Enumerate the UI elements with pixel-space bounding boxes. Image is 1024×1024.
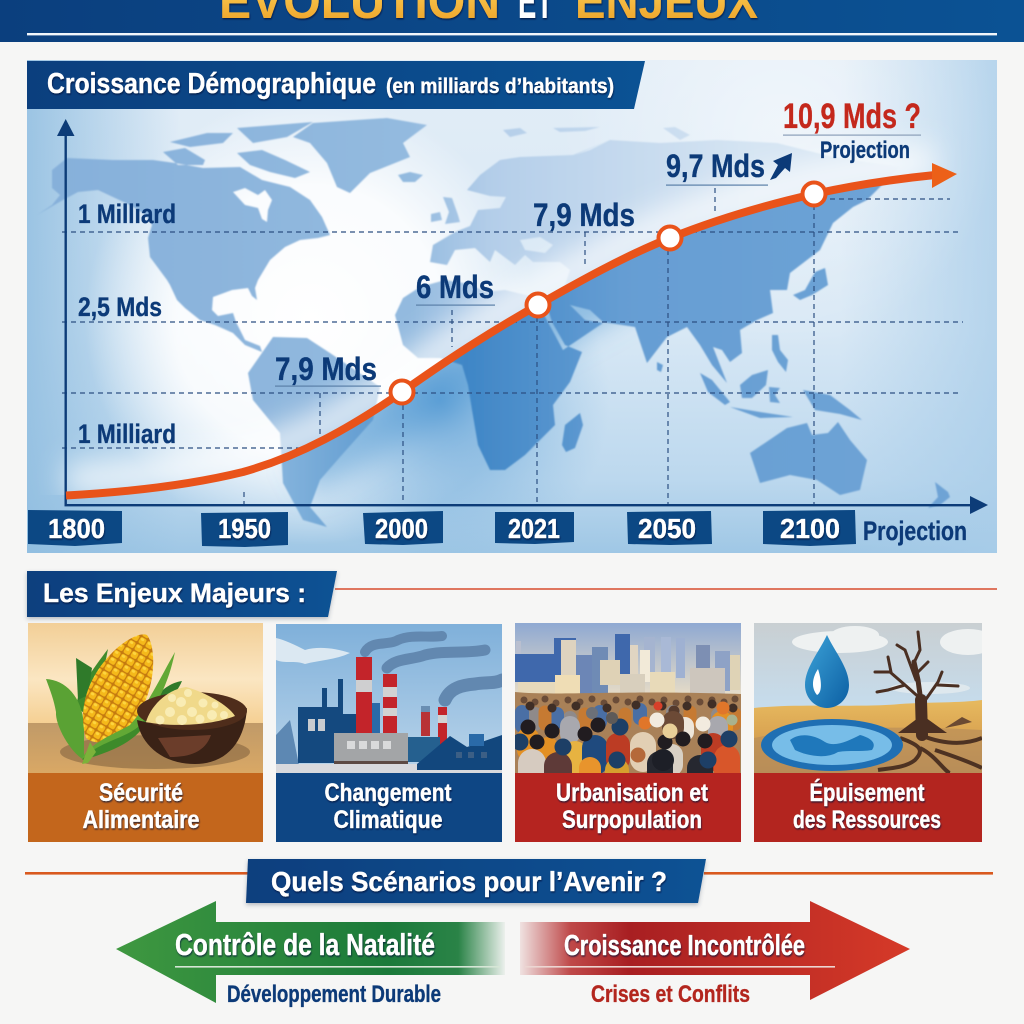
- grid lines: [62, 188, 963, 505]
- year labels: 2050: [638, 513, 696, 544]
- projection label: 10,9 Mds ?: [783, 97, 921, 136]
- year labels: 2021: [508, 513, 560, 544]
- arrow: uncontrolled growth scenario: [520, 901, 910, 1000]
- illustration: corn and bowl: [28, 623, 263, 773]
- value labels: 6 Mds: [416, 269, 494, 305]
- projection label: [783, 97, 921, 164]
- back row: [535, 712, 718, 726]
- population curve: [66, 163, 957, 496]
- illustration: factory: [276, 624, 502, 773]
- section heading: scenarios: Quels Scénarios pour l’Avenir ?: [271, 866, 667, 897]
- year labels: 2100: [780, 513, 840, 544]
- illustration: water drop, pool and dead tree: [754, 623, 996, 773]
- y axis labels: 2,5 Mds: [78, 292, 162, 322]
- card: food security: Sécurité: [99, 779, 183, 807]
- data points: [390, 182, 826, 404]
- world map background: [27, 60, 997, 553]
- card label: [515, 773, 741, 842]
- pool: [761, 719, 903, 771]
- corn cob: [83, 634, 153, 742]
- year labels: 1800: [48, 513, 105, 544]
- chart heading: (en milliards d’habitants): [386, 75, 614, 98]
- value labels: 9,7 Mds: [666, 148, 765, 184]
- section heading: Les Enjeux Majeurs: Les Enjeux Majeurs :: [43, 578, 306, 608]
- value labels: [275, 148, 792, 387]
- title text: [219, 0, 758, 29]
- card label: [276, 773, 502, 842]
- bowl: [137, 708, 247, 764]
- corn leaves: [76, 649, 108, 715]
- card: resource depletion: [754, 623, 996, 842]
- bowl of grains: [146, 687, 235, 725]
- card: climate change: Changement: [324, 779, 452, 807]
- card label: [754, 773, 982, 842]
- skyline: [515, 634, 740, 694]
- chart heading: Croissance Démographique: [47, 68, 376, 100]
- projection label: Projection: [820, 137, 910, 164]
- cracks: [878, 735, 982, 773]
- y axis labels: [78, 199, 176, 449]
- card: urbanisation: Surpopulation: [562, 806, 702, 834]
- chart heading: [27, 61, 645, 109]
- mid row bodies: [528, 722, 722, 762]
- card: food security: Alimentaire: [82, 806, 200, 834]
- arrow: birth control scenario: Contrôle de la Natalité: [175, 927, 435, 962]
- year labels: [28, 510, 856, 547]
- axes: [57, 119, 988, 514]
- year labels: 2000: [375, 513, 428, 544]
- icon: small up arrow: [770, 153, 792, 180]
- grey unit: [334, 733, 408, 762]
- illustration: city and crowd: [515, 623, 741, 776]
- crowd: [515, 692, 741, 776]
- card: food security: [28, 623, 263, 842]
- factory buildings: [298, 679, 356, 763]
- title banner: [0, 0, 1024, 42]
- card: resource depletion: Épuisement: [810, 778, 925, 807]
- dark roof: [417, 735, 502, 770]
- front bodies: [518, 763, 546, 775]
- smoke: [365, 636, 502, 700]
- card: urbanisation: Urbanisation et: [556, 779, 709, 807]
- card: resource depletion: des Ressources: [793, 806, 941, 834]
- card label: [28, 773, 263, 842]
- arrow: birth control scenario: [116, 901, 505, 1003]
- y axis labels: 1 Milliard: [78, 199, 176, 229]
- panel: population growth chart: [27, 60, 997, 553]
- dead tree: [875, 632, 958, 735]
- section heading: Les Enjeux Majeurs: [27, 571, 997, 617]
- x axis projection note: Projection: [863, 516, 967, 546]
- arrow: uncontrolled growth scenario: Croissance Incontrôlée: [564, 930, 805, 962]
- chimneys: [356, 657, 372, 735]
- section heading: scenarios: [25, 859, 993, 903]
- y axis labels: 1 Milliard: [78, 419, 176, 449]
- year labels: 1950: [218, 513, 271, 544]
- heads: [528, 725, 705, 742]
- crises text: Crises et Conflits: [591, 981, 750, 1008]
- card: climate change: Climatique: [334, 806, 443, 834]
- card: climate change: [276, 624, 502, 842]
- card: urbanisation: [515, 623, 741, 842]
- value labels: 7,9 Mds: [533, 197, 635, 233]
- value labels: 7,9 Mds: [275, 351, 377, 387]
- sustainable development text: Développement Durable: [227, 981, 441, 1008]
- water drop: [805, 635, 849, 708]
